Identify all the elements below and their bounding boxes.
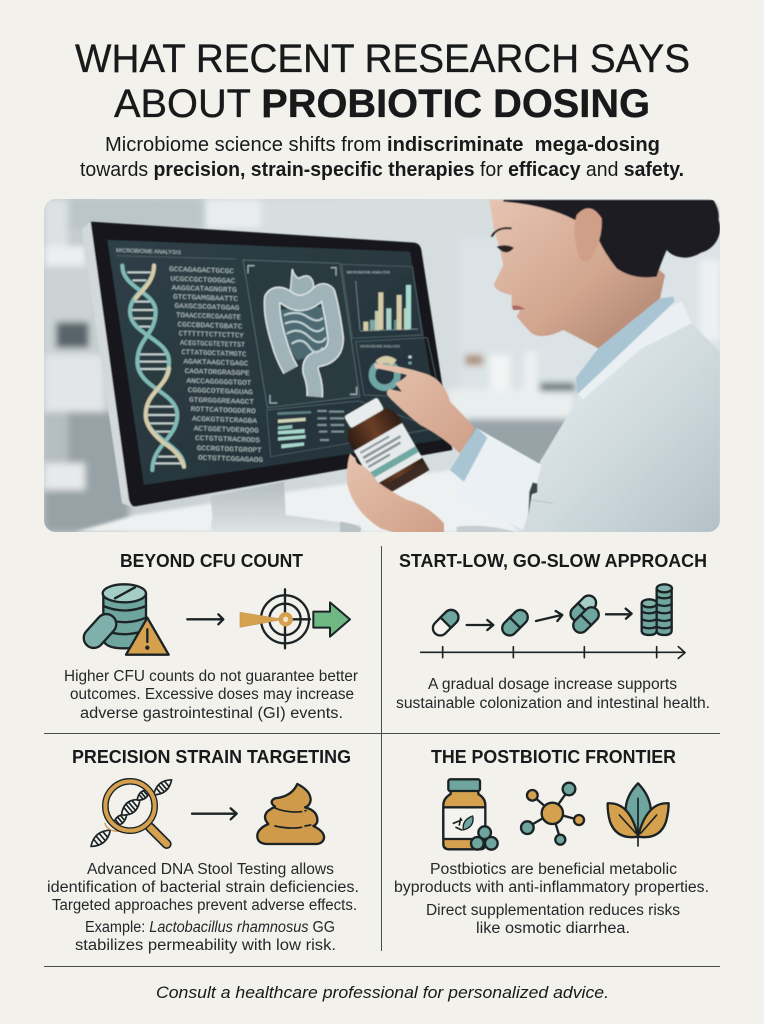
body text: Higher CFU counts do not guarantee better (64, 668, 358, 685)
DNA sequence text: OCTGTTCGGAGAOG (198, 455, 263, 465)
monitor stand (211, 482, 361, 533)
icon: stacks of tablets (642, 584, 672, 635)
panel: the postbiotic frontier (394, 747, 709, 937)
arrow (187, 614, 223, 624)
icons: escalating capsules on a timeline (421, 584, 685, 658)
pointing hand (374, 363, 475, 453)
lab coat body (522, 323, 720, 532)
monitor body (82, 221, 135, 508)
blue shirt collar (576, 297, 674, 395)
desk (75, 470, 520, 532)
probiotic bottle (344, 397, 430, 492)
DNA sequence text: TOAACCCRCGAAGTE (176, 312, 241, 322)
panel: beyond CFU count (64, 551, 358, 722)
body text: Postbiotics are beneficial metabolic (430, 861, 677, 878)
coat sleeve (464, 428, 542, 530)
icon: three leaves (608, 783, 669, 846)
icons: supplement jar, molecule, leaves (443, 779, 669, 850)
title: ABOUT PROBIOTIC DOSING (114, 82, 650, 126)
icon: capsule (80, 610, 120, 652)
DNA sequence text: GCCAGAGACTGCGC (169, 266, 234, 276)
intestine diagram panel (243, 260, 360, 408)
arrow (192, 808, 237, 819)
icon: green arrow (313, 602, 350, 637)
body text: Targeted approaches prevent adverse effects. (52, 897, 357, 914)
subtitle: Microbiome science shifts from indiscriminate mega-dosing (105, 134, 660, 156)
panel: precision strain targeting (47, 747, 359, 954)
icon: DNA under magnifying glass (88, 776, 175, 850)
body text: adverse gastrointestinal (GI) events. (80, 705, 343, 722)
DNA sequence text: CTTATGOCTATMGTC (181, 349, 246, 359)
eyebrow, eye and lips (492, 228, 525, 310)
subtitle (80, 134, 684, 181)
body text: A gradual dosage increase supports (428, 676, 677, 693)
timeline arrow (421, 647, 685, 658)
DNA sequence text: CCTGTGTRACRODS (195, 435, 260, 445)
body text (396, 676, 710, 712)
icon: tablet stack (103, 584, 146, 648)
icon: filled capsule (499, 607, 531, 638)
DNA sequence text: ACEGTGCGTETETTST (180, 340, 245, 350)
icon: warning triangle (126, 618, 169, 655)
body text: stabilizes permeability with low risk. (75, 937, 336, 954)
icon: molecule (521, 783, 584, 845)
icon: two capsules (568, 593, 602, 636)
footer note: Consult a healthcare professional for personalized advice. (156, 983, 609, 1002)
body text: Direct supplementation reduces risks (426, 902, 680, 919)
DNA sequence text: ACTGGETVDERQOG (194, 425, 259, 436)
title: WHAT RECENT RESEARCH SAYS (75, 37, 690, 81)
icons: pill stack, warning, arrow, target (80, 584, 350, 655)
donut chart on screen: MICROBIOME ANALYSIS (360, 344, 400, 349)
monitor and stand (zoom coordinates) (82, 221, 452, 533)
body text: Example: Lactobacillus rhamnosus GG (85, 919, 335, 936)
DNA sequence text: CTTTTTTCTTCTTCY (179, 330, 245, 341)
DNA helix on screen (122, 266, 184, 470)
DNA sequence text: ANCCAGGGGGTGOT (186, 378, 251, 388)
shirt cuff (450, 428, 487, 482)
DNA sequence text: GAXGCSCOATGGAG (174, 303, 239, 313)
DNA sequence text (169, 266, 263, 465)
DNA sequence text: ACGKGTGTCRAGBA (192, 416, 258, 426)
hair and bun (503, 200, 720, 277)
DNA sequence text: GCCRGTOGTGROPT (197, 445, 262, 455)
body text: Advanced DNA Stool Testing allows (87, 861, 334, 878)
heading: beyond CFU count: BEYOND CFU COUNT (120, 551, 303, 571)
pen in coat pocket (528, 482, 553, 515)
icon: half-filled capsule (430, 607, 461, 638)
subtitle: towards precision, strain-specific therapies for efficacy and safety. (80, 159, 684, 181)
donut chart on screen (356, 338, 441, 398)
desk items (340, 522, 362, 532)
neck and face (489, 200, 665, 348)
arrow (467, 620, 493, 630)
screen heading: MICROBIOME ANALYSIS (116, 248, 181, 256)
holding hand and bottle (zoom coordinates) (344, 397, 445, 532)
title (75, 37, 690, 126)
section dividers (44, 546, 720, 966)
arrow (606, 609, 632, 619)
DNA sequence text: CAOATORGRASGPE (185, 368, 250, 378)
DNA sequence text: CGGGCOTEGAGUAG (188, 387, 253, 397)
DNA sequence text: AGAKTAAGCTGAGC (183, 358, 248, 369)
DNA sequence text: GTCTGAMGBAATTC (173, 294, 238, 304)
body text: sustainable colonization and intestinal health. (396, 695, 710, 712)
DNA sequence text: AAGGCATAGNGRTG (172, 285, 237, 295)
icon: target (240, 589, 310, 648)
icons: DNA magnifier, arrow, stool (88, 776, 324, 850)
body text (64, 668, 358, 722)
body text: identification of bacterial strain deficiencies. (47, 879, 359, 896)
monitor screen (107, 240, 441, 485)
bar chart on screen (342, 264, 422, 338)
body text: byproducts with anti-inflammatory properties. (394, 879, 709, 896)
DNA sequence text: CGCCBDACTGBATC (177, 321, 242, 332)
arrow (536, 611, 562, 621)
DNA sequence text: ROTTCATOOGDERO (191, 406, 256, 416)
icon: stool (257, 784, 324, 844)
body text (47, 861, 359, 954)
holding hand (347, 453, 444, 533)
panel: start-low, go-slow approach (396, 551, 710, 712)
DNA sequence text: UCGCCGCTOOGGAC (170, 276, 235, 286)
bar chart on screen: MICROBIOME ANALYSIS (347, 270, 390, 275)
heading: start-low go-slow: START-LOW, GO-SLOW APPROACH (399, 551, 707, 571)
icon: supplement jar (443, 779, 498, 850)
DNA sequence text: GTGRGGGREAAGCT (189, 397, 254, 407)
body text: outcomes. Excessive doses may increase (70, 686, 354, 703)
heading: precision strain targeting: PRECISION STRAIN TARGETING (72, 747, 351, 767)
ear (575, 208, 602, 261)
data table on screen (267, 401, 436, 457)
coat lapel (577, 301, 692, 399)
blurred lab background (44, 199, 720, 532)
heading: postbiotic frontier: THE POSTBIOTIC FRONTIER (431, 747, 676, 767)
scientist (zoom coordinates) (340, 200, 720, 532)
body text (394, 861, 709, 937)
hero photo: scientist examining probiotic bottle at microbiome analysis monitor (44, 199, 720, 533)
body text: like osmotic diarrhea. (476, 920, 630, 937)
